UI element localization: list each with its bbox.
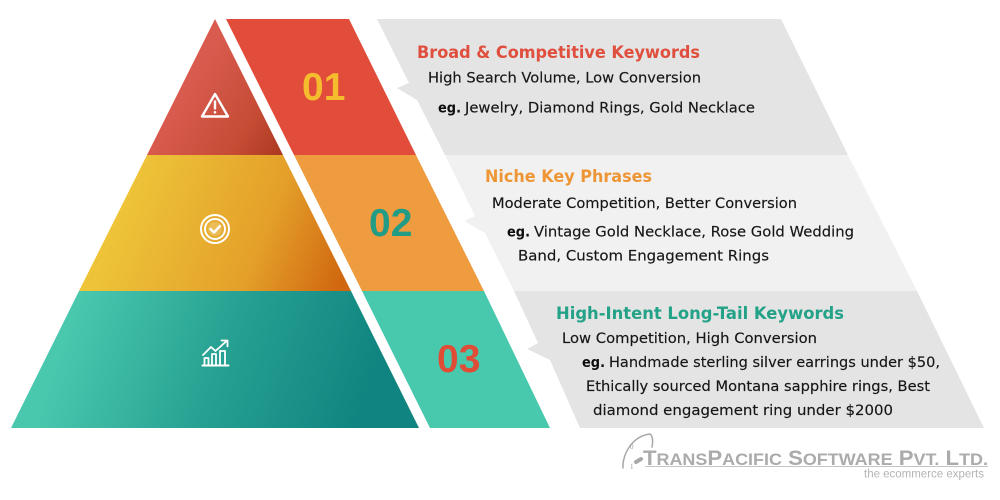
pyramid right tier 3	[362, 291, 550, 428]
example 2: eg.	[507, 224, 530, 240]
pyramid right tier 1	[226, 19, 416, 155]
icon: warning triangle	[202, 94, 228, 116]
example 3: Handmade sterling silver earrings under $50,	[609, 355, 940, 371]
pyramid left tier 1	[147, 19, 283, 155]
example 2: Vintage Gold Necklace, Rose Gold Wedding	[534, 224, 854, 240]
example 1: Jewelry, Diamond Rings, Gold Necklace	[464, 100, 755, 116]
pyramid right tier 2	[294, 155, 484, 291]
example 3: eg.	[582, 355, 605, 371]
example 1: eg.	[438, 100, 461, 116]
heading 3: High-Intent Long-Tail Keywords	[556, 304, 844, 323]
example 3	[582, 355, 940, 419]
number 02: 02	[369, 202, 412, 245]
panel 3 background	[514, 291, 984, 428]
logo swoosh: 1	[630, 463, 634, 471]
pyramid left tier 2	[79, 155, 351, 291]
icon: target with check	[201, 215, 229, 243]
logo name: TRANSPACIFIC SOFTWARE PVT. LTD.	[643, 447, 988, 470]
panel 1 background	[377, 19, 848, 155]
number 01: 01	[302, 66, 345, 109]
logo swoosh	[623, 434, 653, 471]
example 2	[507, 224, 854, 264]
panel: high-intent long-tail keywords	[514, 291, 984, 428]
example 3: Ethically sourced Montana sapphire rings, Best	[586, 379, 931, 395]
subheading 1: High Search Volume, Low Conversion	[428, 70, 701, 86]
panel: broad and competitive keywords	[377, 19, 848, 155]
panel: niche key phrases	[445, 155, 917, 291]
logo swoosh: 0	[630, 443, 634, 451]
logo tagline: the ecommerce experts	[864, 468, 984, 480]
logo underline	[645, 466, 988, 467]
subheading 3: Low Competition, High Conversion	[562, 331, 817, 347]
pyramid left tier 3	[11, 291, 419, 428]
number 03: 03	[437, 338, 480, 381]
subheading 2: Moderate Competition, Better Conversion	[492, 196, 797, 212]
example 3: diamond engagement ring under $2000	[593, 403, 893, 419]
example 2: Band, Custom Engagement Rings	[518, 248, 769, 264]
heading 1: Broad & Competitive Keywords	[417, 43, 700, 62]
icon: growth chart	[202, 340, 228, 366]
logo: TransPacific Software	[623, 434, 988, 480]
panel 2 background	[445, 155, 917, 291]
heading 2: Niche Key Phrases	[485, 167, 652, 186]
